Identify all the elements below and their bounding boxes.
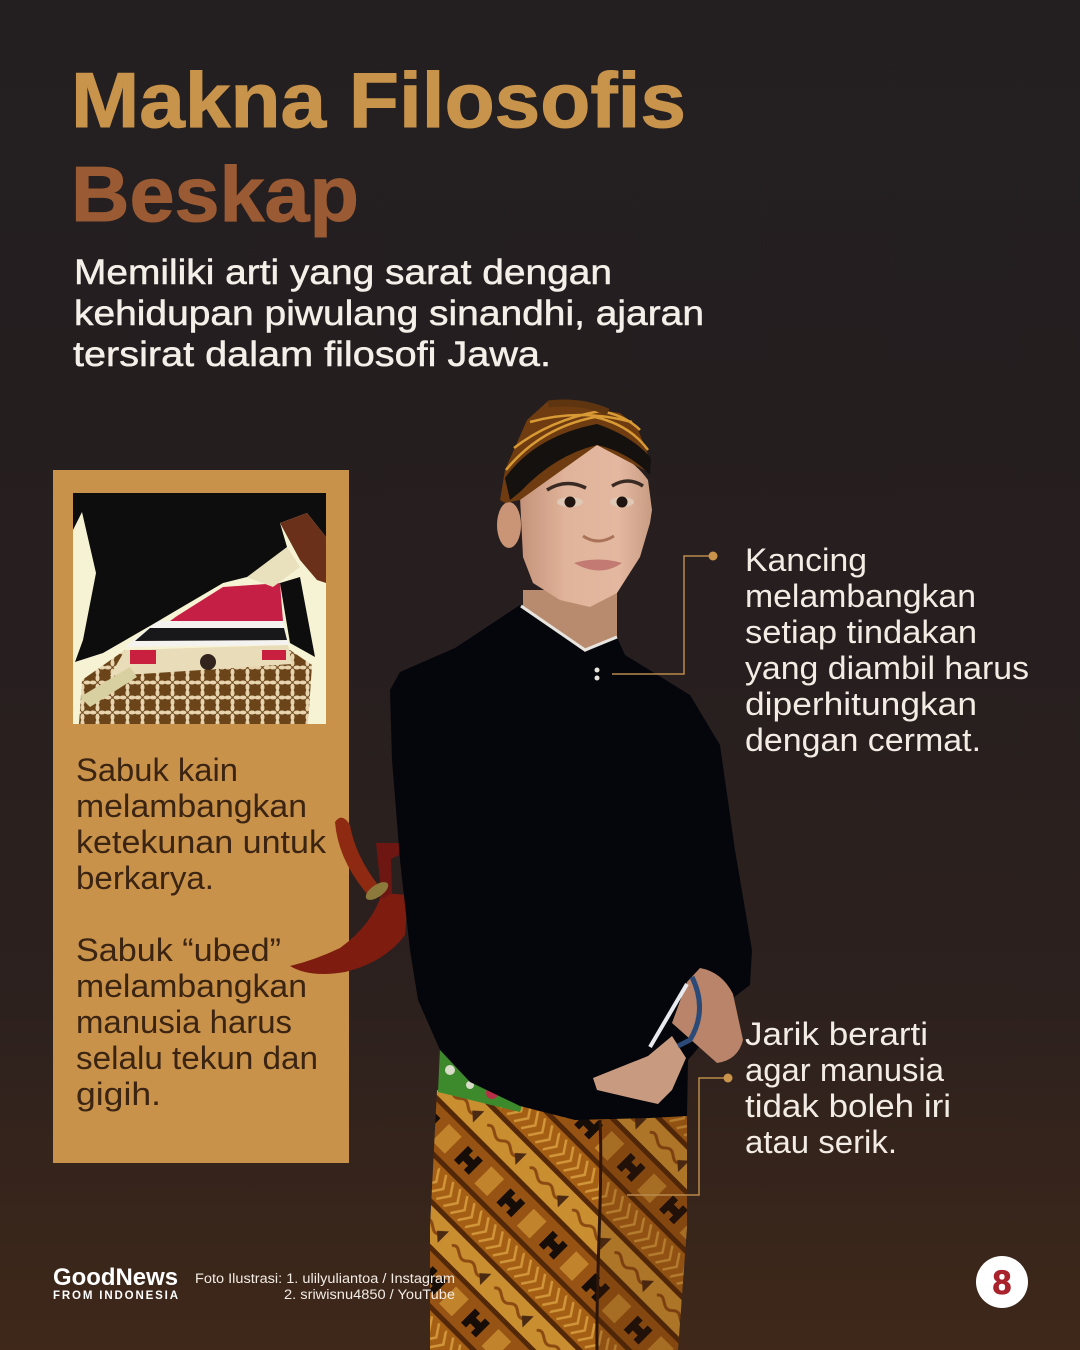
panel text: Sabuk kain [76, 752, 238, 788]
subtitle text block: tersirat dalam filosofi Jawa. [73, 335, 551, 374]
neck [523, 590, 617, 652]
blangkon [500, 402, 651, 503]
text: jarik [745, 1016, 951, 1160]
panel text [76, 752, 327, 1112]
panel text: gigih. [76, 1076, 161, 1112]
face [520, 445, 652, 607]
text: jarik: agar manusia [745, 1052, 944, 1088]
page number badge [976, 1256, 1028, 1308]
ear [497, 502, 521, 548]
panel text: melambangkan [76, 788, 307, 824]
photo credits: 2. sriwisnu4850 / YouTube [284, 1287, 455, 1302]
text: jarik: atau serik. [745, 1124, 897, 1160]
text: kancing: diperhitungkan [745, 686, 977, 722]
face details [547, 481, 643, 570]
logo: GoodNews: GoodNews [53, 1264, 178, 1291]
batik jarik [430, 1090, 687, 1350]
panel text: selalu tekun dan [76, 1040, 318, 1076]
logo: GoodNews: FROM INDONESIA [53, 1290, 178, 1302]
panel: sabuk [53, 470, 349, 1163]
panel text: Sabuk “ubed” [76, 932, 281, 968]
connector: jarik [627, 1074, 732, 1195]
beskap jacket [390, 605, 752, 1120]
figure: man in beskap [290, 402, 752, 1350]
panel text: ketekunan untuk [76, 824, 327, 860]
text: kancing: dengan cermat. [745, 722, 981, 758]
connector: kancing [612, 552, 718, 674]
page number badge: 8 [993, 1264, 1011, 1302]
photo credits [195, 1271, 455, 1302]
subtitle text block: Memiliki arti yang sarat dengan [74, 253, 612, 292]
panel text: manusia harus [76, 1004, 292, 1040]
text: kancing: setiap tindakan [745, 614, 977, 650]
shirt collar [521, 606, 617, 650]
title: Beskap [71, 150, 359, 238]
hands [593, 968, 743, 1104]
green belt [438, 1048, 530, 1112]
subtitle text block: kehidupan piwulang sinandhi, ajaran [74, 294, 704, 333]
text: kancing: yang diambil harus [745, 650, 1029, 686]
photo credits: Foto Ilustrasi: 1. ulilyuliantoa / Instagram [195, 1271, 455, 1286]
text: jarik: Jarik berarti [745, 1016, 928, 1052]
subtitle text block [73, 253, 704, 374]
buttons [594, 668, 600, 680]
panel text: berkarya. [76, 860, 214, 896]
text: jarik: tidak boleh iri [745, 1088, 951, 1124]
text: kancing: melambangkan [745, 578, 976, 614]
text: kancing: Kancing [745, 542, 867, 578]
title [71, 56, 686, 238]
keris [290, 818, 408, 974]
title: Makna Filosofis [71, 56, 686, 144]
inset photo: belt detail [73, 493, 326, 724]
text: kancing [745, 542, 1029, 758]
panel text: melambangkan [76, 968, 307, 1004]
